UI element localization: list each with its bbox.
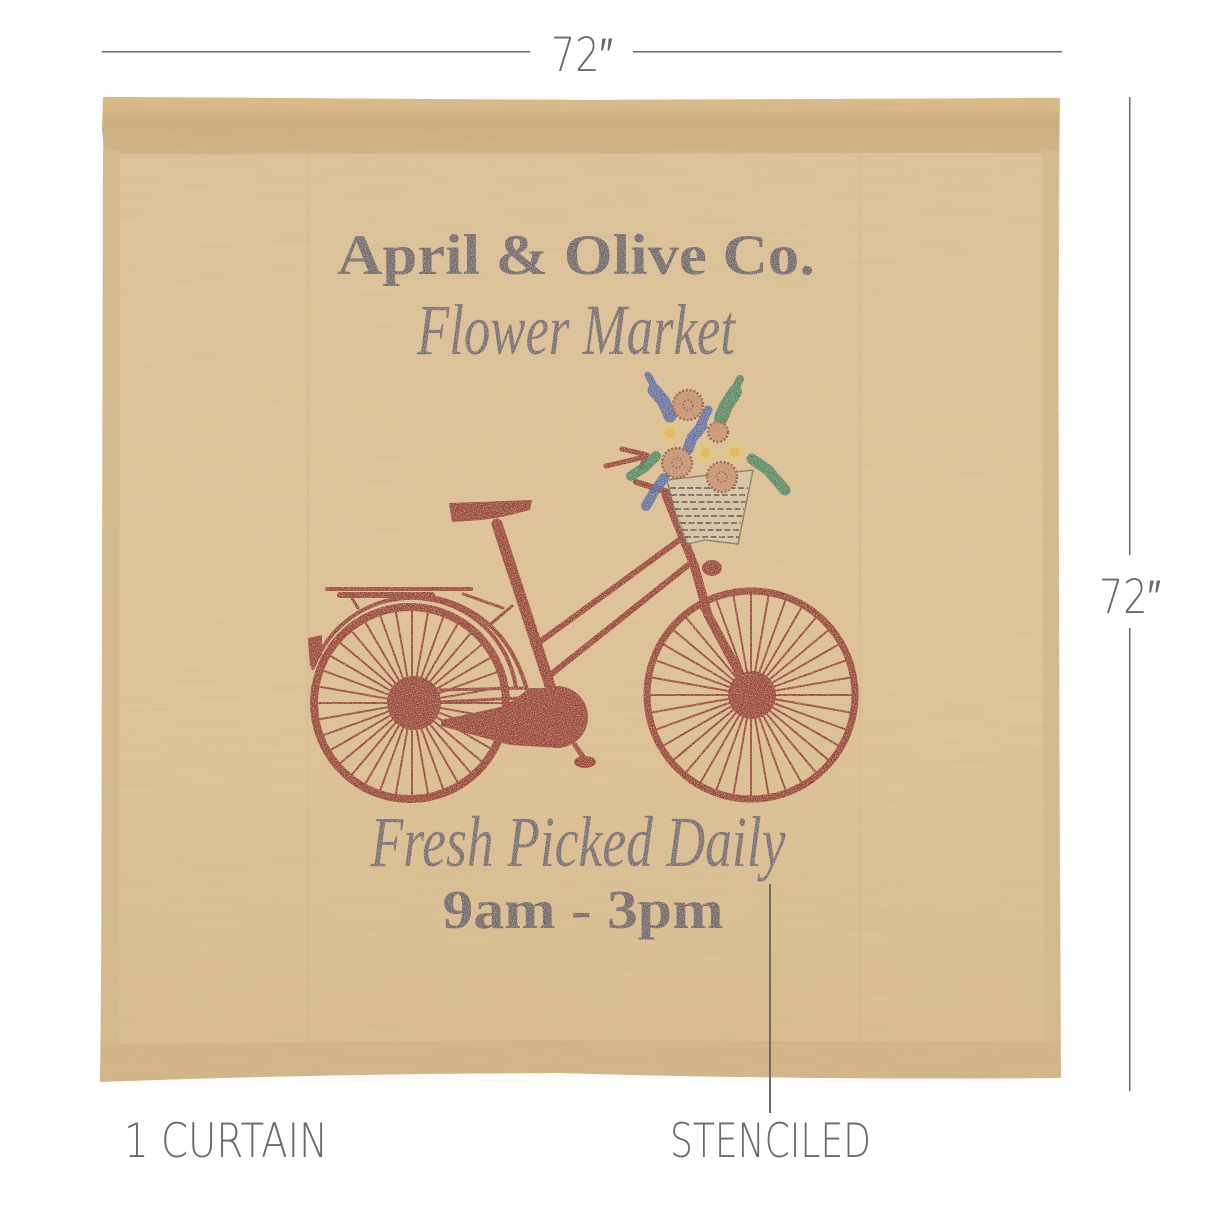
saddle [449,500,532,522]
rear fender and rack [308,589,527,690]
right side hem [1042,150,1060,1046]
script text: Fresh Picked Daily: Fresh Picked Daily [370,802,786,882]
rear wheel [314,607,506,799]
width label: 72″ [551,28,613,83]
green leaves [631,379,785,490]
height label: 72″ [1099,570,1161,625]
stenciled leader line [769,884,771,1113]
daisies [662,390,737,492]
blue flowers [646,375,708,506]
flower basket [631,375,785,544]
headlamp [702,560,722,576]
chain guard [440,686,596,768]
yellow flowers [660,423,745,463]
bottom hem [100,1040,1061,1082]
bicycle [308,449,855,799]
hours: 9am - 3pm: 9am - 3pm [442,879,724,940]
front spokes [650,594,852,796]
fabric weave texture [100,97,1061,1082]
frame [497,482,751,695]
wicker basket [667,470,753,544]
handlebar [606,449,647,467]
label: 1 curtain: 1 CURTAIN [124,1114,328,1169]
script heading: Flower Market: Flower Market [416,290,736,370]
front wheel [647,591,855,799]
curtain panel [100,97,1061,1082]
top rod pocket [102,97,1060,154]
label: stenciled: STENCILED [670,1114,871,1169]
left side hem [101,150,120,1046]
rear spokes [319,610,505,796]
fabric seams [308,154,860,1042]
heading: April & Olive Co.: April & Olive Co. [337,224,815,287]
